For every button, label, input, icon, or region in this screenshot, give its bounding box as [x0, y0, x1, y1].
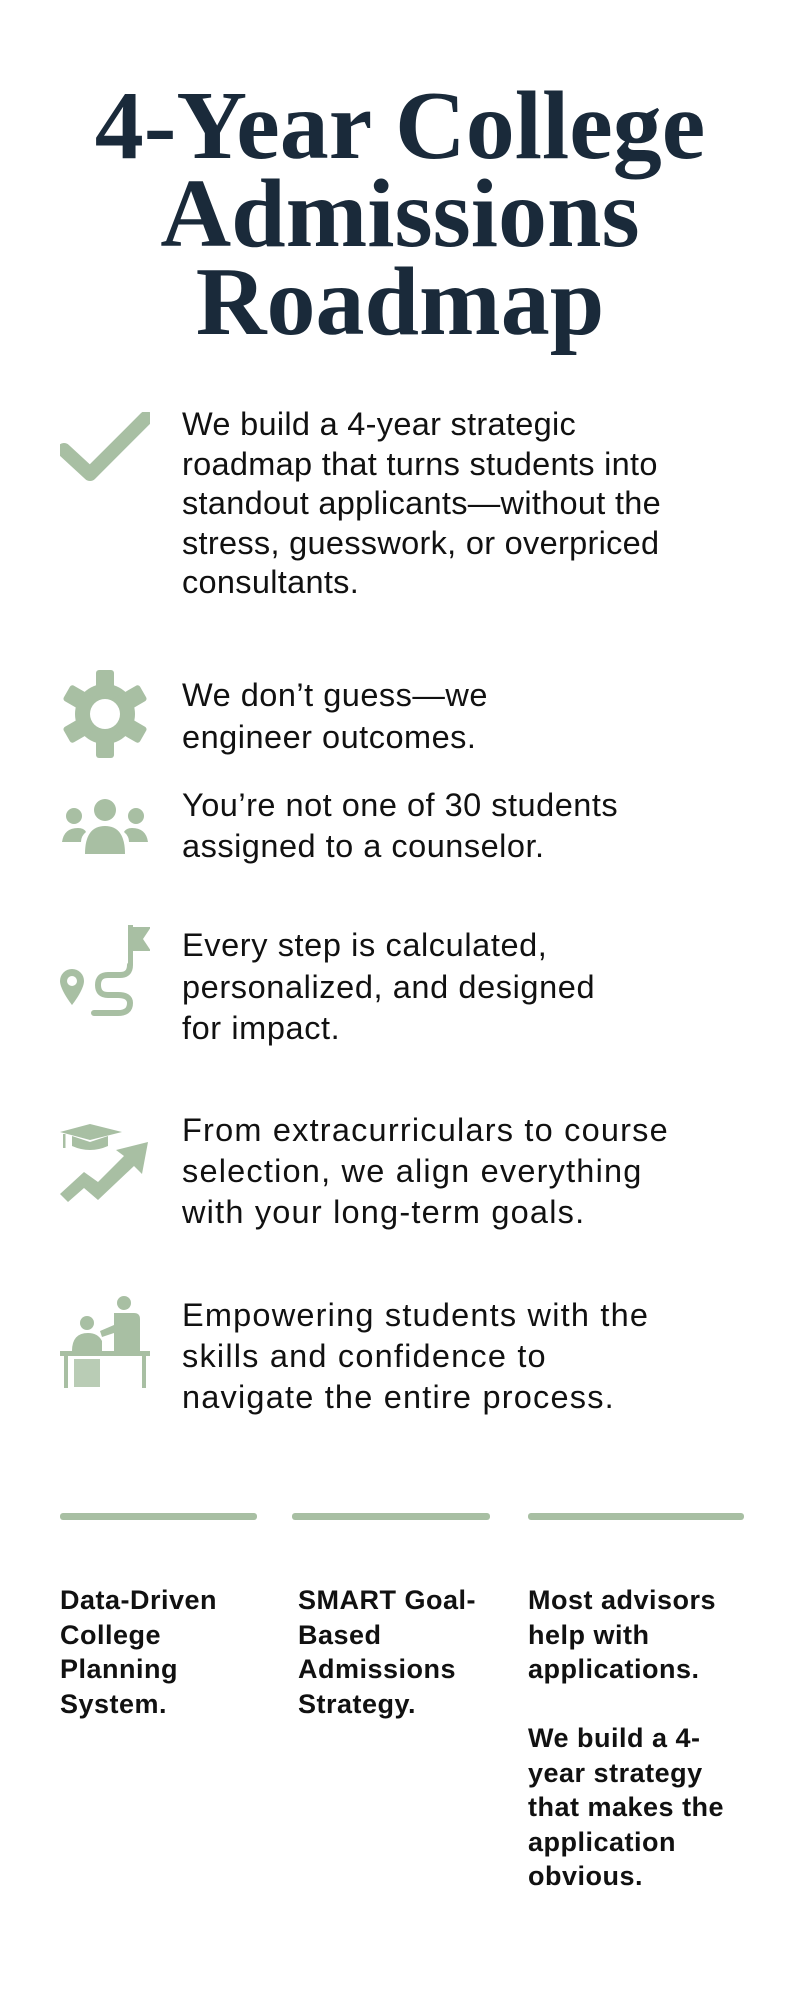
- item: gear: [64, 670, 488, 758]
- column: smart goal: Based: [298, 1620, 382, 1650]
- column: data-driven: System.: [60, 1688, 167, 1718]
- column: most advisors: that makes the: [528, 1792, 724, 1822]
- text: roadmap: standout applicants—without the: [182, 485, 661, 521]
- icon: checkmark: [60, 412, 150, 481]
- text: roadmap: We build a 4-year strategic: [182, 406, 576, 442]
- title: 4-Year College: [95, 72, 705, 180]
- item: roadmap flag: [60, 925, 595, 1046]
- icon: people: [62, 799, 148, 854]
- icon: graduation cap and arrow: [60, 1124, 148, 1202]
- title: Roadmap: [196, 248, 604, 356]
- text: not one of 30: [182, 787, 618, 864]
- text: engineer outcomes: We don’t guess—we: [182, 677, 488, 713]
- text: roadmap: [182, 406, 661, 600]
- column: smart goal: SMART Goal-: [298, 1585, 476, 1615]
- text: roadmap: roadmap that turns students into: [182, 446, 658, 482]
- text: calculated: [182, 927, 595, 1046]
- column: most advisors: obvious.: [528, 1861, 643, 1891]
- divider bar 1: [60, 1513, 257, 1520]
- column: most advisors: help with: [528, 1620, 650, 1650]
- column: most advisors: year strategy: [528, 1758, 703, 1788]
- column: most advisors: We build a 4-: [528, 1723, 701, 1753]
- column: smart goal: [298, 1585, 476, 1718]
- icon: teacher and student at desk: [60, 1296, 150, 1388]
- text: calculated: Every step is calculated,: [182, 927, 547, 963]
- column: most advisors: application: [528, 1826, 676, 1856]
- text: roadmap: consultants.: [182, 564, 359, 600]
- text: empowering: navigate the entire process.: [182, 1379, 615, 1415]
- text: align: From extracurriculars to course: [182, 1112, 669, 1148]
- column: data-driven: Data-Driven: [60, 1585, 217, 1615]
- icon: path with flag: [60, 925, 150, 1016]
- text: align: selection, we align everything: [182, 1153, 643, 1189]
- text: empowering: [182, 1297, 649, 1415]
- column: smart goal: Strategy.: [298, 1688, 416, 1718]
- text: align: with your long-term goals.: [182, 1194, 585, 1230]
- text: roadmap: stress, guesswork, or overpriced: [182, 524, 659, 560]
- title: [95, 72, 705, 356]
- text: engineer outcomes: engineer outcomes.: [182, 719, 476, 755]
- column: data-driven: [60, 1585, 217, 1718]
- item: mentoring: [60, 1296, 649, 1415]
- column: smart goal: Admissions: [298, 1654, 456, 1684]
- title: Admissions: [160, 160, 640, 268]
- text: calculated: personalized, and designed: [182, 968, 595, 1004]
- text: not one of 30: assigned to a counselor.: [182, 828, 545, 864]
- column: most advisors: [528, 1585, 724, 1891]
- column: data-driven: Planning: [60, 1654, 178, 1684]
- item: people: [62, 787, 618, 864]
- column: most advisors: Most advisors: [528, 1585, 716, 1615]
- divider bar 3: [528, 1513, 744, 1520]
- divider bar 2: [292, 1513, 490, 1520]
- text: calculated: for impact.: [182, 1010, 340, 1046]
- icon: gear: [64, 670, 146, 758]
- text: not one of 30: You’re not one of 30 students: [182, 787, 618, 823]
- text: align: [182, 1112, 669, 1230]
- text: empowering: skills and confidence to: [182, 1338, 547, 1374]
- item: graduation growth: [60, 1112, 669, 1230]
- item: checkmark: [60, 406, 661, 600]
- text: empowering: Empowering students with the: [182, 1297, 649, 1333]
- column: data-driven: College: [60, 1620, 161, 1650]
- text: engineer outcomes: [182, 677, 488, 755]
- column: most advisors: applications.: [528, 1654, 700, 1684]
